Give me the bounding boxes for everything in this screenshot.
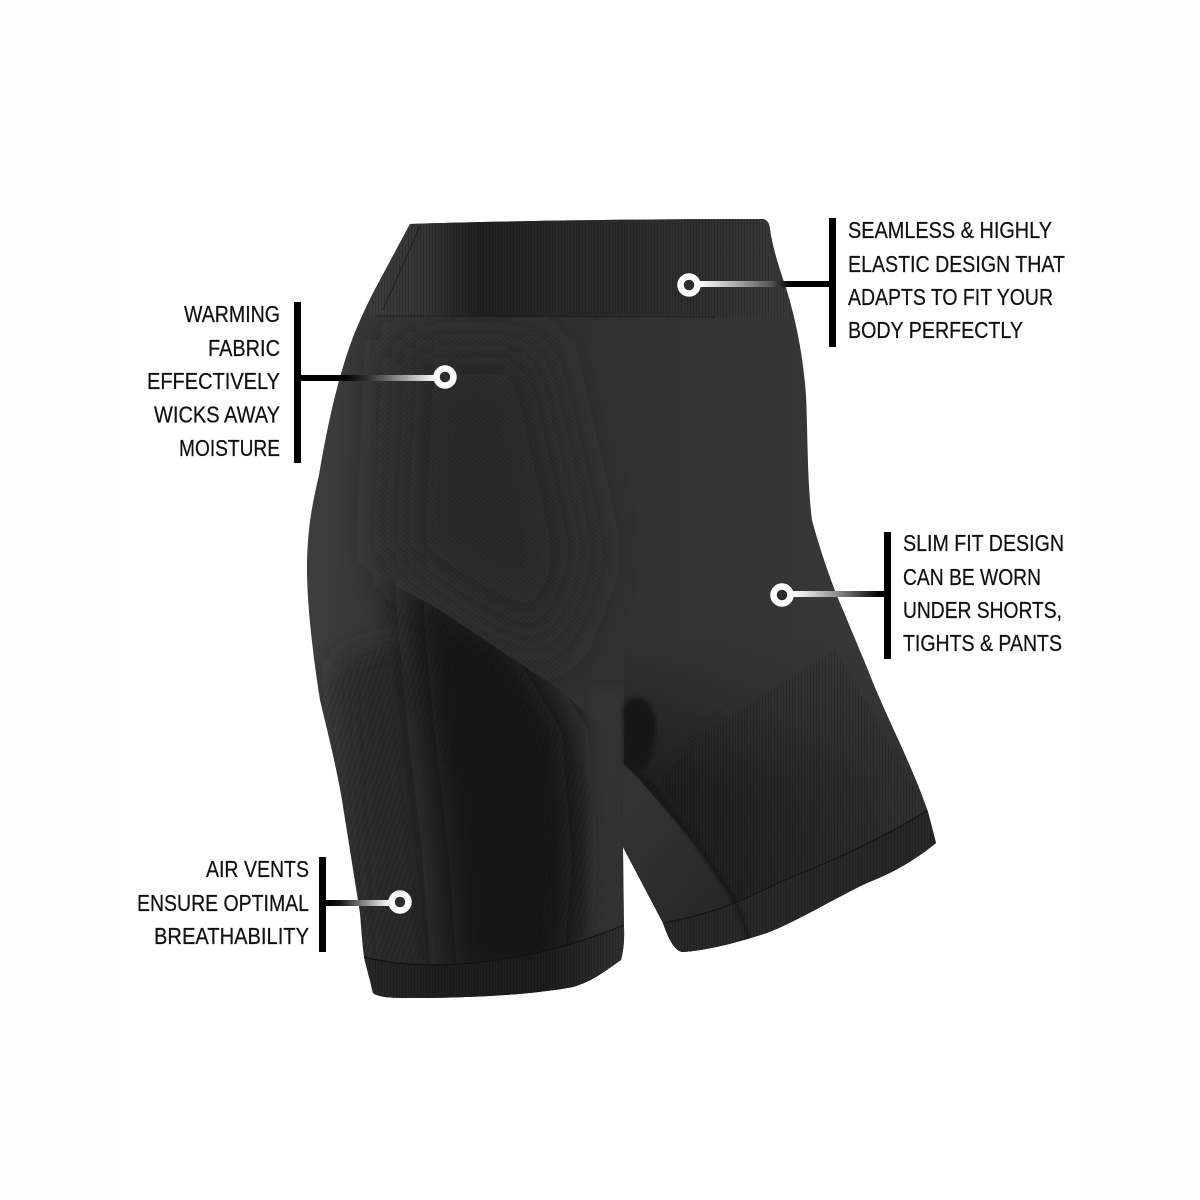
shorts product image xyxy=(300,210,945,1010)
waistband lower seam xyxy=(376,316,715,317)
callout connector xyxy=(697,281,829,287)
callout marker xyxy=(436,368,454,386)
left leg hem seam xyxy=(364,925,624,965)
callout text: BODY PERFECTLY xyxy=(848,317,1023,343)
waistband xyxy=(370,210,790,317)
callout connector xyxy=(301,375,437,381)
callout text: WARMING xyxy=(184,301,280,327)
callout marker xyxy=(774,586,790,604)
left leg ribbed zone xyxy=(385,600,623,955)
dark panel fill xyxy=(405,560,585,990)
front leg xyxy=(624,664,936,952)
callout connector xyxy=(790,591,884,597)
outer thigh mesh xyxy=(318,691,349,842)
callout text: BREATHABILITY xyxy=(154,923,309,949)
waistband left seam xyxy=(383,226,420,310)
callout marker xyxy=(392,894,408,910)
inner thigh panel xyxy=(623,762,740,960)
callout connector xyxy=(326,900,392,906)
callout marker xyxy=(680,276,698,294)
callout text: ENSURE OPTIMAL xyxy=(137,890,309,916)
callout text xyxy=(137,856,309,949)
callout bar xyxy=(294,302,301,463)
callout text: CAN BE WORN xyxy=(903,564,1041,590)
front leg ribs xyxy=(816,650,856,690)
callout bar xyxy=(319,857,326,952)
callout text xyxy=(848,217,1065,343)
outer thigh shade xyxy=(340,640,450,1000)
hip mesh zone xyxy=(405,366,433,562)
shorts body fabric xyxy=(300,210,940,1010)
callout bar xyxy=(829,218,836,347)
front leg fill xyxy=(624,664,936,952)
callout text: TIGHTS & PANTS xyxy=(903,630,1062,656)
callout text xyxy=(147,301,280,461)
inner thigh seam xyxy=(625,762,750,945)
left leg dark side panel xyxy=(405,560,585,990)
callout text: AIR VENTS xyxy=(206,856,309,882)
callout: warming fabric xyxy=(147,301,454,463)
callout: slim fit design xyxy=(774,530,1064,659)
front leg hem seam xyxy=(663,810,928,923)
left leg inner light edge xyxy=(592,756,624,937)
callout text: SLIM FIT DESIGN xyxy=(903,530,1064,556)
callout text: FABRIC xyxy=(208,335,280,361)
callout bar xyxy=(884,532,891,659)
front leg hem xyxy=(663,810,945,960)
callout: air vents xyxy=(137,856,408,952)
callout text: SEAMLESS & HIGHLY xyxy=(848,217,1052,243)
left leg hem xyxy=(364,941,624,998)
callout text: MOISTURE xyxy=(179,435,280,461)
callout: seamless design xyxy=(680,217,1065,347)
callout text: UNDER SHORTS, xyxy=(903,597,1062,623)
callout text: WICKS AWAY xyxy=(154,402,280,428)
callout text: ADAPTS TO FIT YOUR xyxy=(848,284,1053,310)
front leg mesh patch xyxy=(670,700,735,765)
callout text: ELASTIC DESIGN THAT xyxy=(848,251,1065,277)
callout text: EFFECTIVELY xyxy=(147,368,280,394)
crotch gusset shadow xyxy=(623,698,655,770)
callout text xyxy=(903,530,1064,656)
